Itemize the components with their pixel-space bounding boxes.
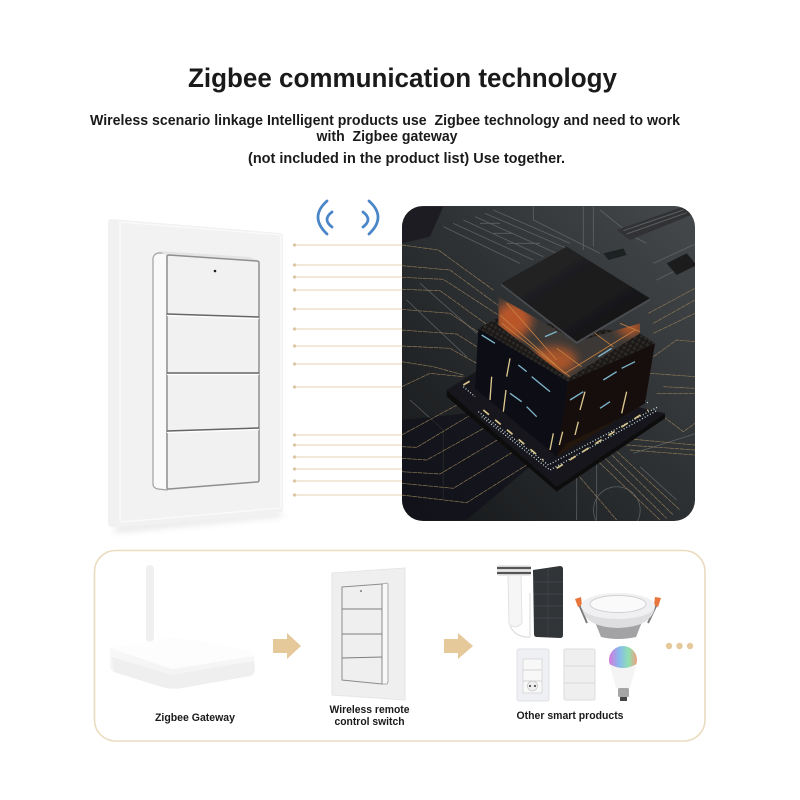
bottom panel <box>94 550 705 741</box>
arrow 2 <box>444 633 473 659</box>
label: Wireless remote control switch: Wireless remote <box>330 704 410 716</box>
chip illustration panel <box>402 206 697 533</box>
label: Wireless remote control switch: control switch <box>334 716 405 728</box>
description text: with Zigbee gateway <box>316 129 458 145</box>
gold circuit traces <box>402 245 695 520</box>
signal lines <box>293 243 403 497</box>
title: Zigbee communication technology <box>188 63 617 93</box>
icon: recessed downlight <box>575 593 661 639</box>
icon: Zigbee gateway <box>110 565 255 689</box>
indicator dot <box>214 270 216 272</box>
icon: wireless signal waves <box>318 201 378 234</box>
grey circuit background <box>407 207 697 533</box>
icon: three-gang switch <box>564 649 595 700</box>
label: Zigbee Gateway: Zigbee Gateway <box>155 712 236 724</box>
icon: wall socket and switch <box>517 649 549 701</box>
description text: Wireless scenario linkage Intelligent products use Zigbee technology and need to work <box>90 113 681 129</box>
arrow 1 <box>273 633 301 659</box>
base board <box>447 370 665 487</box>
label: Other smart products: Other smart products <box>516 710 624 722</box>
icon: color smart bulb <box>609 646 637 701</box>
label: Wireless remote control switch <box>330 704 410 728</box>
icon: small wall switch <box>332 568 405 700</box>
icon: curtain motor and solar panel <box>497 565 563 638</box>
top chip <box>501 247 650 342</box>
description text: (not included in the product list) Use together. <box>248 151 565 167</box>
icon: more dots <box>666 643 693 649</box>
large wall switch <box>108 219 283 532</box>
description text <box>90 113 681 167</box>
cube <box>475 328 568 457</box>
